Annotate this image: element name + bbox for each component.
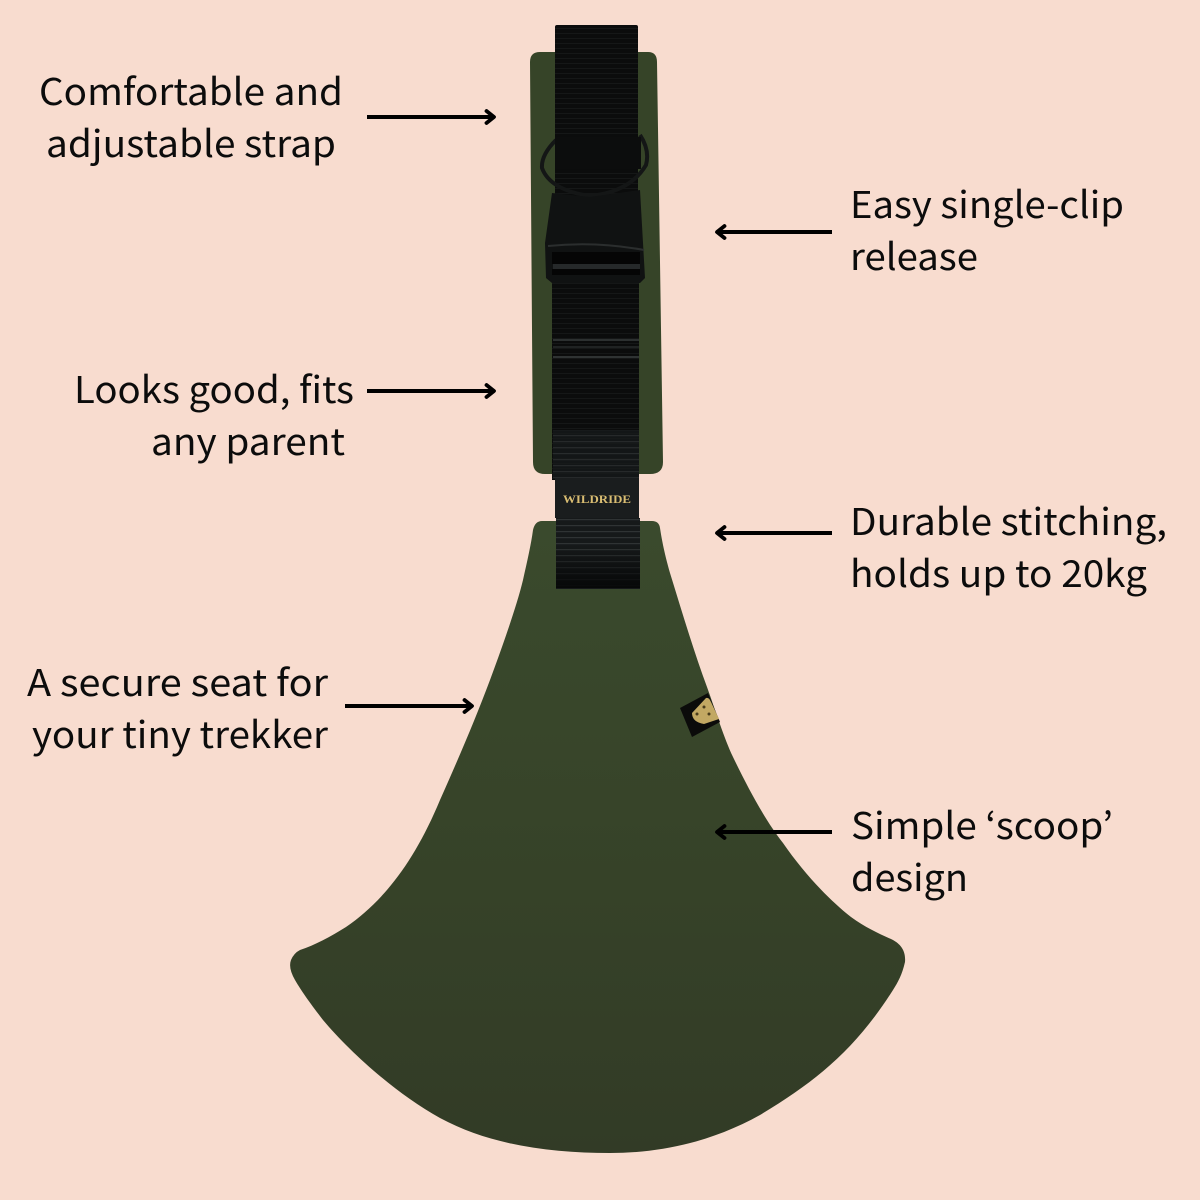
callout: durable stitching — [717, 492, 1167, 598]
brand label: WILDRIDE — [563, 494, 631, 506]
callout: single-clip release: release — [850, 227, 978, 281]
shoulder pad panel — [530, 52, 663, 474]
callout: durable stitching: Durable stitching, — [850, 492, 1167, 546]
strap base shadow — [556, 545, 640, 588]
callout: looks good: Looks good, fits — [74, 360, 354, 414]
buckle ring — [542, 135, 647, 196]
lower webbing strap — [552, 270, 639, 480]
callout: durable stitching: holds up to 20kg — [850, 544, 1147, 598]
callout: comfortable strap: Comfortable and — [39, 62, 343, 116]
callout: comfortable strap — [39, 62, 494, 168]
callout: scoop design — [717, 796, 1113, 902]
callout: scoop design: Simple ‘scoop’ — [851, 796, 1113, 850]
callout: comfortable strap: adjustable strap — [46, 114, 336, 168]
buckle — [542, 135, 647, 283]
callout: looks good — [74, 360, 494, 466]
logo patch — [680, 693, 720, 737]
strap base — [556, 518, 640, 589]
sling seat panel — [290, 521, 905, 1153]
strap ridges highlight — [553, 430, 639, 478]
callout: secure seat — [27, 653, 472, 759]
callout: secure seat: A secure seat for — [27, 653, 329, 707]
callout: single-clip release — [717, 175, 1124, 281]
buckle body — [545, 190, 645, 283]
callout: scoop design: design — [851, 848, 968, 902]
callout: single-clip release: Easy single-clip — [850, 175, 1124, 229]
sling product illustration — [290, 25, 905, 1153]
upper webbing strap — [555, 25, 638, 200]
callout: looks good: any parent — [151, 412, 345, 466]
callout: secure seat: your tiny trekker — [32, 705, 329, 759]
brand label — [555, 478, 639, 518]
strap band detail — [553, 339, 639, 358]
